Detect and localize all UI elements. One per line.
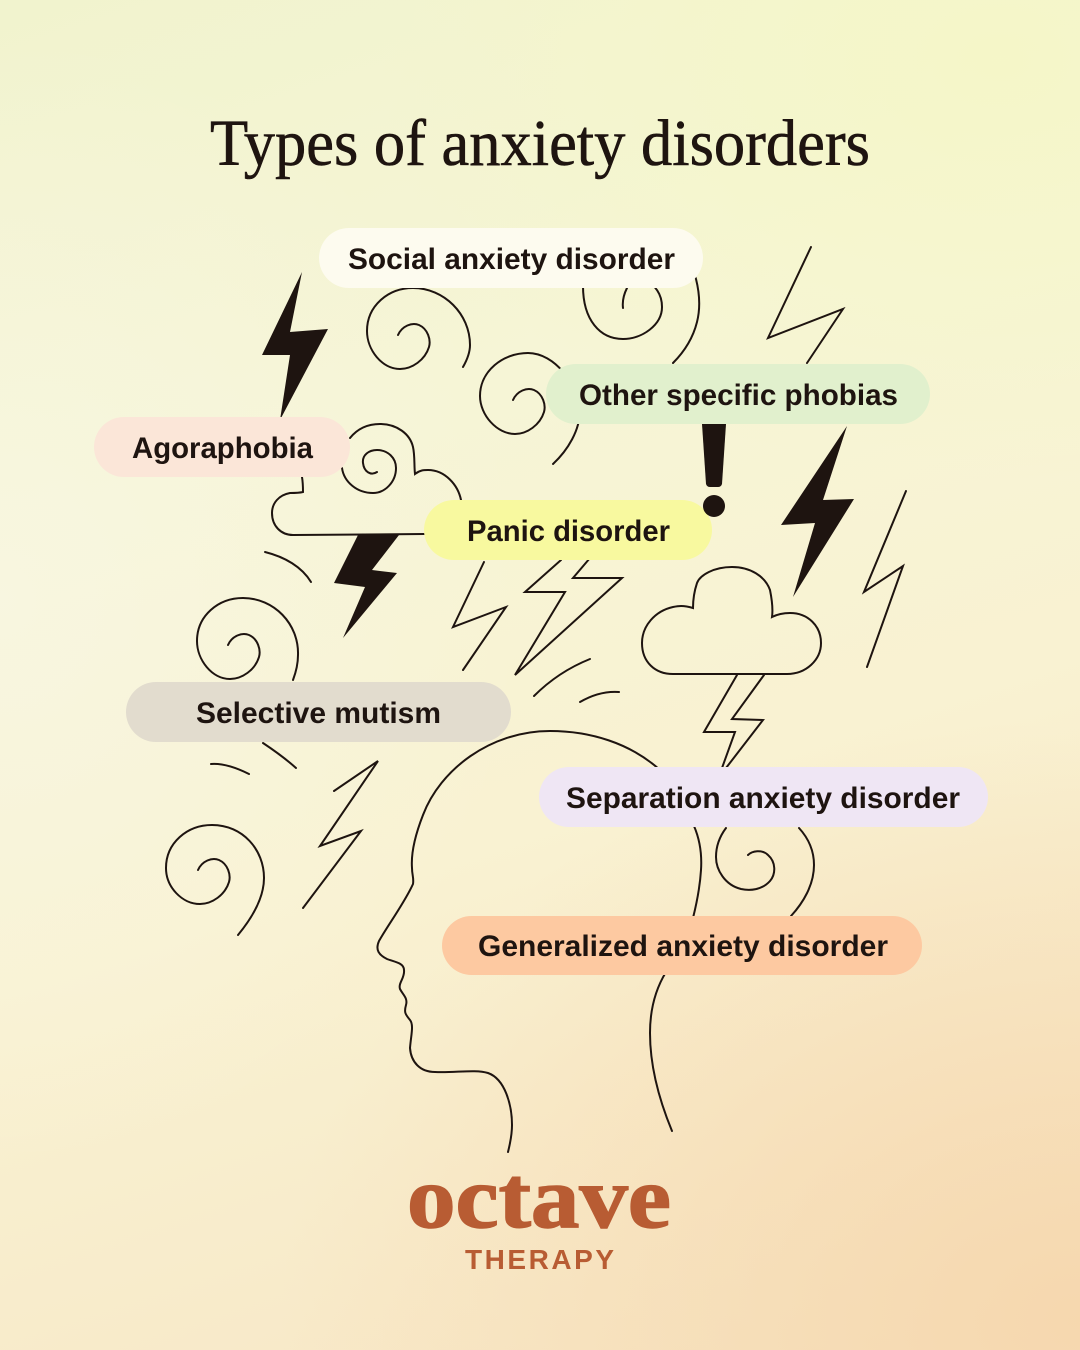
icon: spiral centre <box>480 353 580 464</box>
icon: outline bolt centre <box>453 562 506 670</box>
pill: Panic disorder: Panic disorder <box>467 515 670 548</box>
icon: outline cloud with spiral <box>272 424 461 535</box>
pill: Generalized anxiety disorder: Generalized anxiety disorder <box>478 930 888 963</box>
pill: Separation anxiety disorder <box>539 767 988 827</box>
icon: spiral left <box>197 598 298 680</box>
icon: outline bolt far right <box>864 491 906 667</box>
pill: Social anxiety disorder <box>319 228 703 288</box>
icon: solid lightning bolt right <box>781 426 854 597</box>
icon: outline bolt lower left <box>303 761 378 908</box>
logo: Octave Therapy: THERAPY <box>465 1244 614 1275</box>
pill: Separation anxiety disorder: Separation anxiety disorder <box>566 782 960 815</box>
icon: spiral lower left <box>166 825 264 935</box>
pill: Generalized anxiety disorder <box>442 916 922 975</box>
icon: outline bolt top right <box>768 247 843 363</box>
icon: spiral top centre <box>583 260 699 363</box>
icon: outline bolt centre double <box>515 558 622 675</box>
decorative swoosh marks <box>211 552 619 774</box>
pill: Other specific phobias <box>546 364 930 424</box>
icon: spiral lower right <box>716 828 814 916</box>
icon: exclamation mark <box>702 424 726 517</box>
pill: Panic disorder <box>424 500 712 560</box>
pill: Selective mutism <box>126 682 511 742</box>
pill: Agoraphobia <box>94 417 350 477</box>
illustration: head profile <box>377 731 701 1152</box>
icon: solid lightning bolt upper left <box>262 272 328 420</box>
icon: spiral top left <box>367 288 470 369</box>
pill: Social anxiety disorder: Social anxiety disorder <box>348 243 675 276</box>
pill: Other specific phobias: Other specific phobias <box>579 379 898 412</box>
pill: Selective mutism: Selective mutism <box>196 697 441 730</box>
icon: outline cloud with bolt <box>642 567 821 768</box>
title: Types of anxiety disorders <box>210 107 870 180</box>
icon: solid lightning bolt under cloud <box>334 535 399 638</box>
pill: Agoraphobia: Agoraphobia <box>132 432 313 465</box>
logo: Octave Therapy: octave <box>407 1150 671 1247</box>
